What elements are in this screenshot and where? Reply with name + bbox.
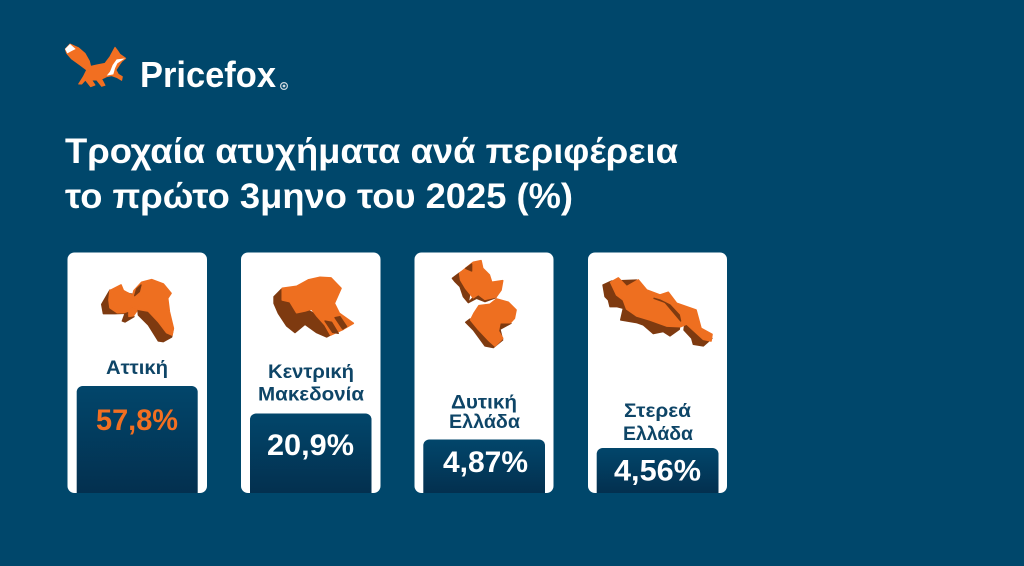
value: 4,56% bbox=[614, 454, 701, 488]
map: Αττική bbox=[102, 280, 173, 342]
label: Στερεά bbox=[624, 401, 691, 422]
label: Κεντρική bbox=[268, 362, 354, 383]
value box bbox=[597, 448, 718, 493]
value: 20,9% bbox=[267, 429, 354, 462]
value: 57,8% bbox=[96, 404, 178, 437]
value box bbox=[77, 386, 198, 493]
title: Τροχαία ατυχήματα ανά περιφέρεια bbox=[65, 132, 679, 171]
title: το πρώτο 3μηνο του 2025 (%) bbox=[65, 177, 573, 216]
registered mark bbox=[281, 83, 287, 89]
label bbox=[623, 401, 693, 445]
label: Ελλάδα bbox=[623, 424, 693, 445]
value: 4,87% bbox=[443, 446, 528, 479]
wordmark: Pricefox bbox=[140, 54, 276, 95]
value box bbox=[250, 414, 372, 493]
panel: Δυτική Ελλάδα bbox=[414, 252, 554, 493]
panel: Κεντρική Μακεδονία bbox=[241, 252, 380, 493]
label: Αττική bbox=[106, 358, 168, 379]
panel: Στερεά Ελλάδα bbox=[588, 252, 727, 493]
value box bbox=[423, 440, 545, 493]
label: Ελλάδα bbox=[449, 412, 520, 433]
label: Μακεδονία bbox=[258, 384, 364, 406]
logo: Pricefox bbox=[65, 44, 287, 95]
icon: fox bbox=[65, 44, 126, 87]
map: Κεντρική Μακεδονία bbox=[274, 277, 353, 337]
panel: Αττική bbox=[68, 252, 207, 493]
label bbox=[258, 362, 364, 406]
label: Δυτική bbox=[451, 392, 517, 414]
map: Στερεά Ελλάδα bbox=[603, 278, 712, 346]
label bbox=[449, 392, 520, 433]
title bbox=[65, 132, 679, 216]
map: Δυτική Ελλάδα bbox=[452, 261, 516, 348]
